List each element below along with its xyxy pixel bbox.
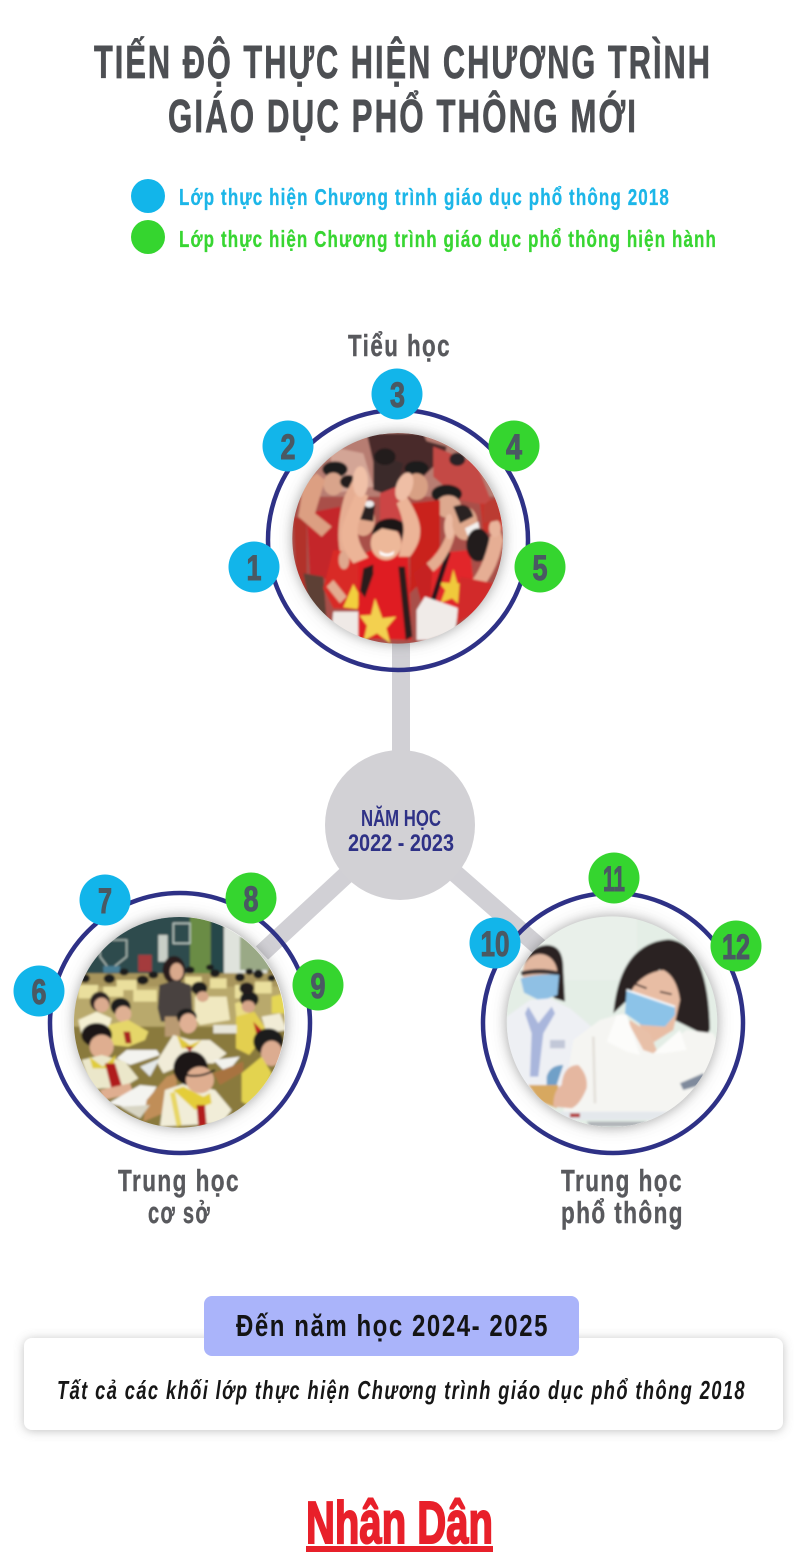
badge 7: 7: [98, 882, 112, 921]
ring: [268, 410, 528, 670]
badge 2: 2: [280, 428, 296, 467]
photo: classroom: [67, 913, 293, 1140]
badge 3: [372, 368, 422, 420]
badge 10: 10: [480, 925, 510, 964]
heading: primary school: Tiểu học: [348, 328, 451, 363]
badge 12: [710, 920, 762, 972]
legend item: current programme: [131, 220, 717, 254]
callout: target for 2024-2025: [24, 1296, 783, 1430]
badge 12: 12: [722, 928, 750, 967]
badge 9: 9: [310, 967, 326, 1006]
legend item: 2018 programme: [131, 179, 670, 213]
badge 7: [80, 874, 130, 926]
badge 4: [488, 420, 540, 472]
badge 9: [292, 960, 344, 1010]
badge 10: [470, 918, 520, 968]
heading: lower secondary: cơ sở: [148, 1195, 211, 1230]
badge 6: 6: [32, 973, 46, 1012]
badge 4: 4: [506, 428, 522, 467]
badge 2: [262, 420, 314, 472]
badge 11: [588, 852, 640, 904]
photo: children in red shirts: [287, 427, 513, 653]
title: [94, 36, 712, 142]
photo: students in masks: [503, 913, 723, 1133]
heading: lower secondary: [118, 1163, 240, 1230]
logo: Nhân Dân: [306, 1490, 493, 1556]
heading: upper secondary: Trung học: [561, 1163, 683, 1198]
badge 5: [514, 542, 566, 592]
callout heading pill: Đến năm học 2024- 2025: [236, 1308, 549, 1343]
panel: upper secondary: [470, 852, 762, 1153]
callout card: [24, 1338, 783, 1430]
hub: school year 2022-2023: NĂM HỌC: [361, 804, 441, 831]
badge 5: 5: [532, 549, 548, 588]
callout heading pill: [204, 1296, 579, 1356]
badge 1: [228, 542, 280, 592]
ring: [50, 893, 310, 1153]
badge 8: 8: [244, 880, 258, 919]
panel: lower secondary: [14, 872, 344, 1153]
heading: upper secondary: [561, 1163, 684, 1230]
badge 8: [226, 872, 276, 924]
connectors from hub to the three circles: [262, 640, 545, 953]
hub: school year 2022-2023: [325, 750, 475, 900]
heading: lower secondary: Trung học: [118, 1163, 240, 1198]
hub: school year 2022-2023: 2022 - 2023: [348, 830, 454, 857]
legend: [131, 179, 717, 254]
ring: [483, 893, 743, 1153]
panel: primary school: [228, 368, 566, 670]
heading: upper secondary: phổ thông: [561, 1195, 684, 1230]
logo: Nhân Dân: Nhân Dân: [306, 1490, 493, 1556]
badge 6: [14, 966, 64, 1016]
badge 3: 3: [390, 376, 405, 415]
badge 11: 11: [603, 860, 625, 899]
badge 1: 1: [246, 549, 262, 588]
